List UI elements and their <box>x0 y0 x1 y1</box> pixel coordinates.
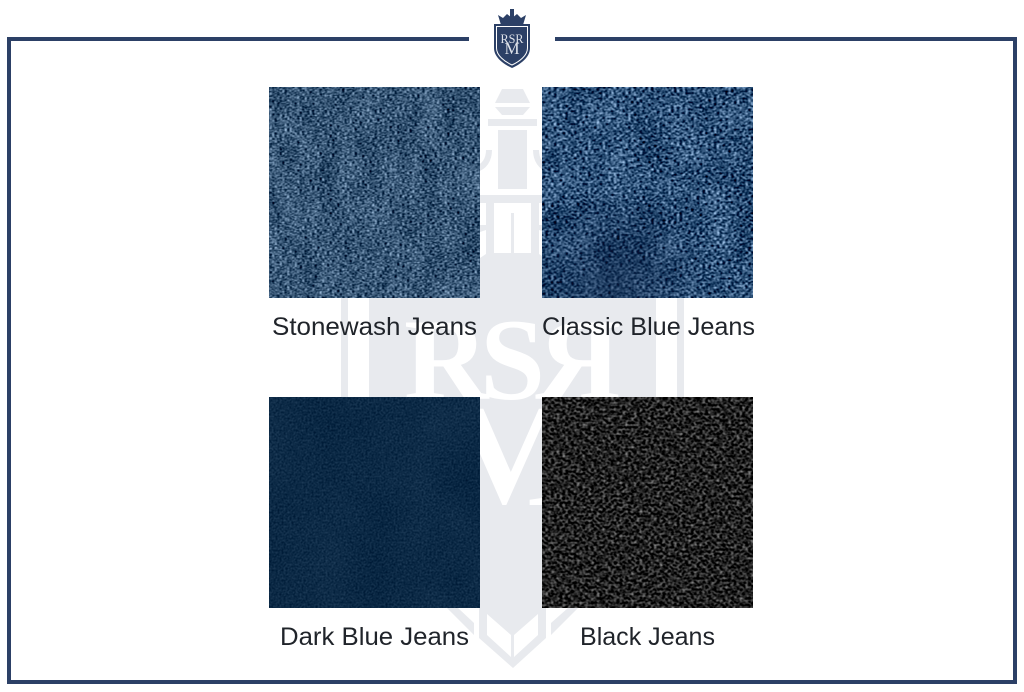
logo monogram: M <box>504 39 520 58</box>
label: stonewash jeans: Stonewash Jeans <box>272 313 477 341</box>
watermark monogram letters: R <box>535 296 621 425</box>
label: dark blue jeans: Dark Blue Jeans <box>280 623 469 651</box>
swatch: stonewash jeans <box>269 87 480 341</box>
watermark monogram letters: M <box>443 374 582 537</box>
watermark: RSM sword and shield logo <box>341 89 684 668</box>
label: classic blue jeans: Classic Blue Jeans <box>542 313 755 341</box>
logo monogram: RSR <box>500 31 524 46</box>
watermark monogram letters: R <box>404 296 490 425</box>
crown and sword <box>498 9 526 26</box>
watermark monogram letters: S <box>480 296 545 425</box>
top logo badge <box>494 9 530 68</box>
logo monogram <box>500 31 524 58</box>
watermark monogram letters <box>404 296 621 537</box>
swatch: classic blue jeans <box>542 87 755 341</box>
label: black jeans: Black Jeans <box>580 623 715 651</box>
swatch: black jeans <box>542 397 753 651</box>
shield <box>494 24 530 68</box>
swatch: dark blue jeans <box>269 397 480 651</box>
